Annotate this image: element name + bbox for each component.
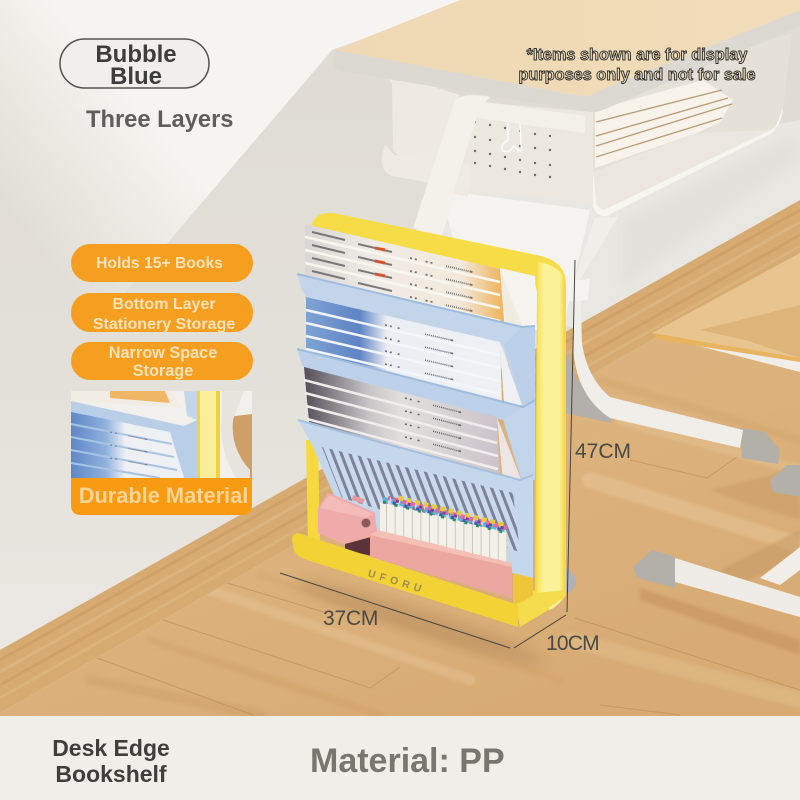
desk edge [333,10,800,112]
durable material card [71,391,252,515]
display note: purposes only and not for sale [518,66,756,84]
shelf under desk [593,130,770,217]
product name: Desk Edge [52,735,170,761]
feature pill: Holds 15+ Books: Holds 15+ Books [96,255,223,272]
feature pill: Narrow Space Storage [71,342,253,380]
floor foot 2 [633,550,675,588]
skirting board [0,200,800,713]
basket [385,72,460,165]
bar shadows on floor [640,588,800,655]
floor foot 1 [740,428,780,464]
material label: Material: PP [310,742,505,780]
right column highlight [537,262,565,610]
book stack middle [306,297,522,405]
product name: Bookshelf [55,761,167,787]
card photo [71,391,252,479]
dimension lines [280,260,575,648]
feature pill: Stationery Storage [71,293,253,333]
pocket 3 with slits [298,420,533,580]
pink tray [370,530,512,598]
dimension: 37CM: 37CM [323,607,378,630]
markers [380,497,507,572]
floor [0,255,800,720]
rod [470,100,585,133]
dimension: 47CM: 47CM [575,440,631,463]
view through frame [500,268,537,330]
right second desk and floor bars [633,253,800,617]
tray inner [513,573,533,605]
feature pill: Narrow Space Storage: Storage [133,362,193,380]
small foot [560,562,576,595]
plank joints [97,457,800,715]
pegboard [459,121,551,178]
book stack lower [304,367,522,482]
colour pill: Bubble Blue: Blue [110,63,162,90]
right lower leg [573,217,743,448]
sharpener [320,495,375,556]
product name [52,735,170,787]
desk leg upper [413,95,490,232]
display note [518,46,756,84]
cross bar [565,279,590,302]
pocket 1 [297,274,535,410]
colour pill: Bubble Blue [60,39,209,90]
desk top [335,0,800,96]
yellow frame [310,213,566,627]
feature pill: Holds 15+ Books [71,244,253,282]
colour pill: Bubble Blue: Bubble [95,41,177,68]
floor wood grain [90,380,800,715]
bookshelf [292,213,576,674]
subtitle: Three Layers [86,107,233,133]
dimension: 10CM: 10CM [546,632,599,655]
left lower leg [414,185,458,240]
display note: *Items shown are for display [527,46,747,64]
durable material card: Durable Material [79,483,248,508]
pocket 2 [297,349,535,482]
base tray [292,533,518,627]
wall light patch [0,0,470,310]
wall right part [430,120,800,330]
hook [502,122,522,152]
second desk top [652,253,800,358]
second desk bar [675,558,800,617]
book stack top [305,224,524,332]
desk underside panel [450,100,593,203]
feature pill: Stationery Storage: Stationery Storage [93,316,235,333]
books under desk [595,80,733,168]
grey leg base [565,347,612,423]
desk [333,0,800,448]
floor foot 3 [770,465,800,497]
feature pill: Narrow Space Storage: Narrow Space [109,344,217,362]
brand text: UFORU [366,567,427,596]
second desk underside bar [680,335,800,372]
bottom band [0,716,800,800]
feature pill: Stationery Storage: Bottom Layer [112,296,216,313]
